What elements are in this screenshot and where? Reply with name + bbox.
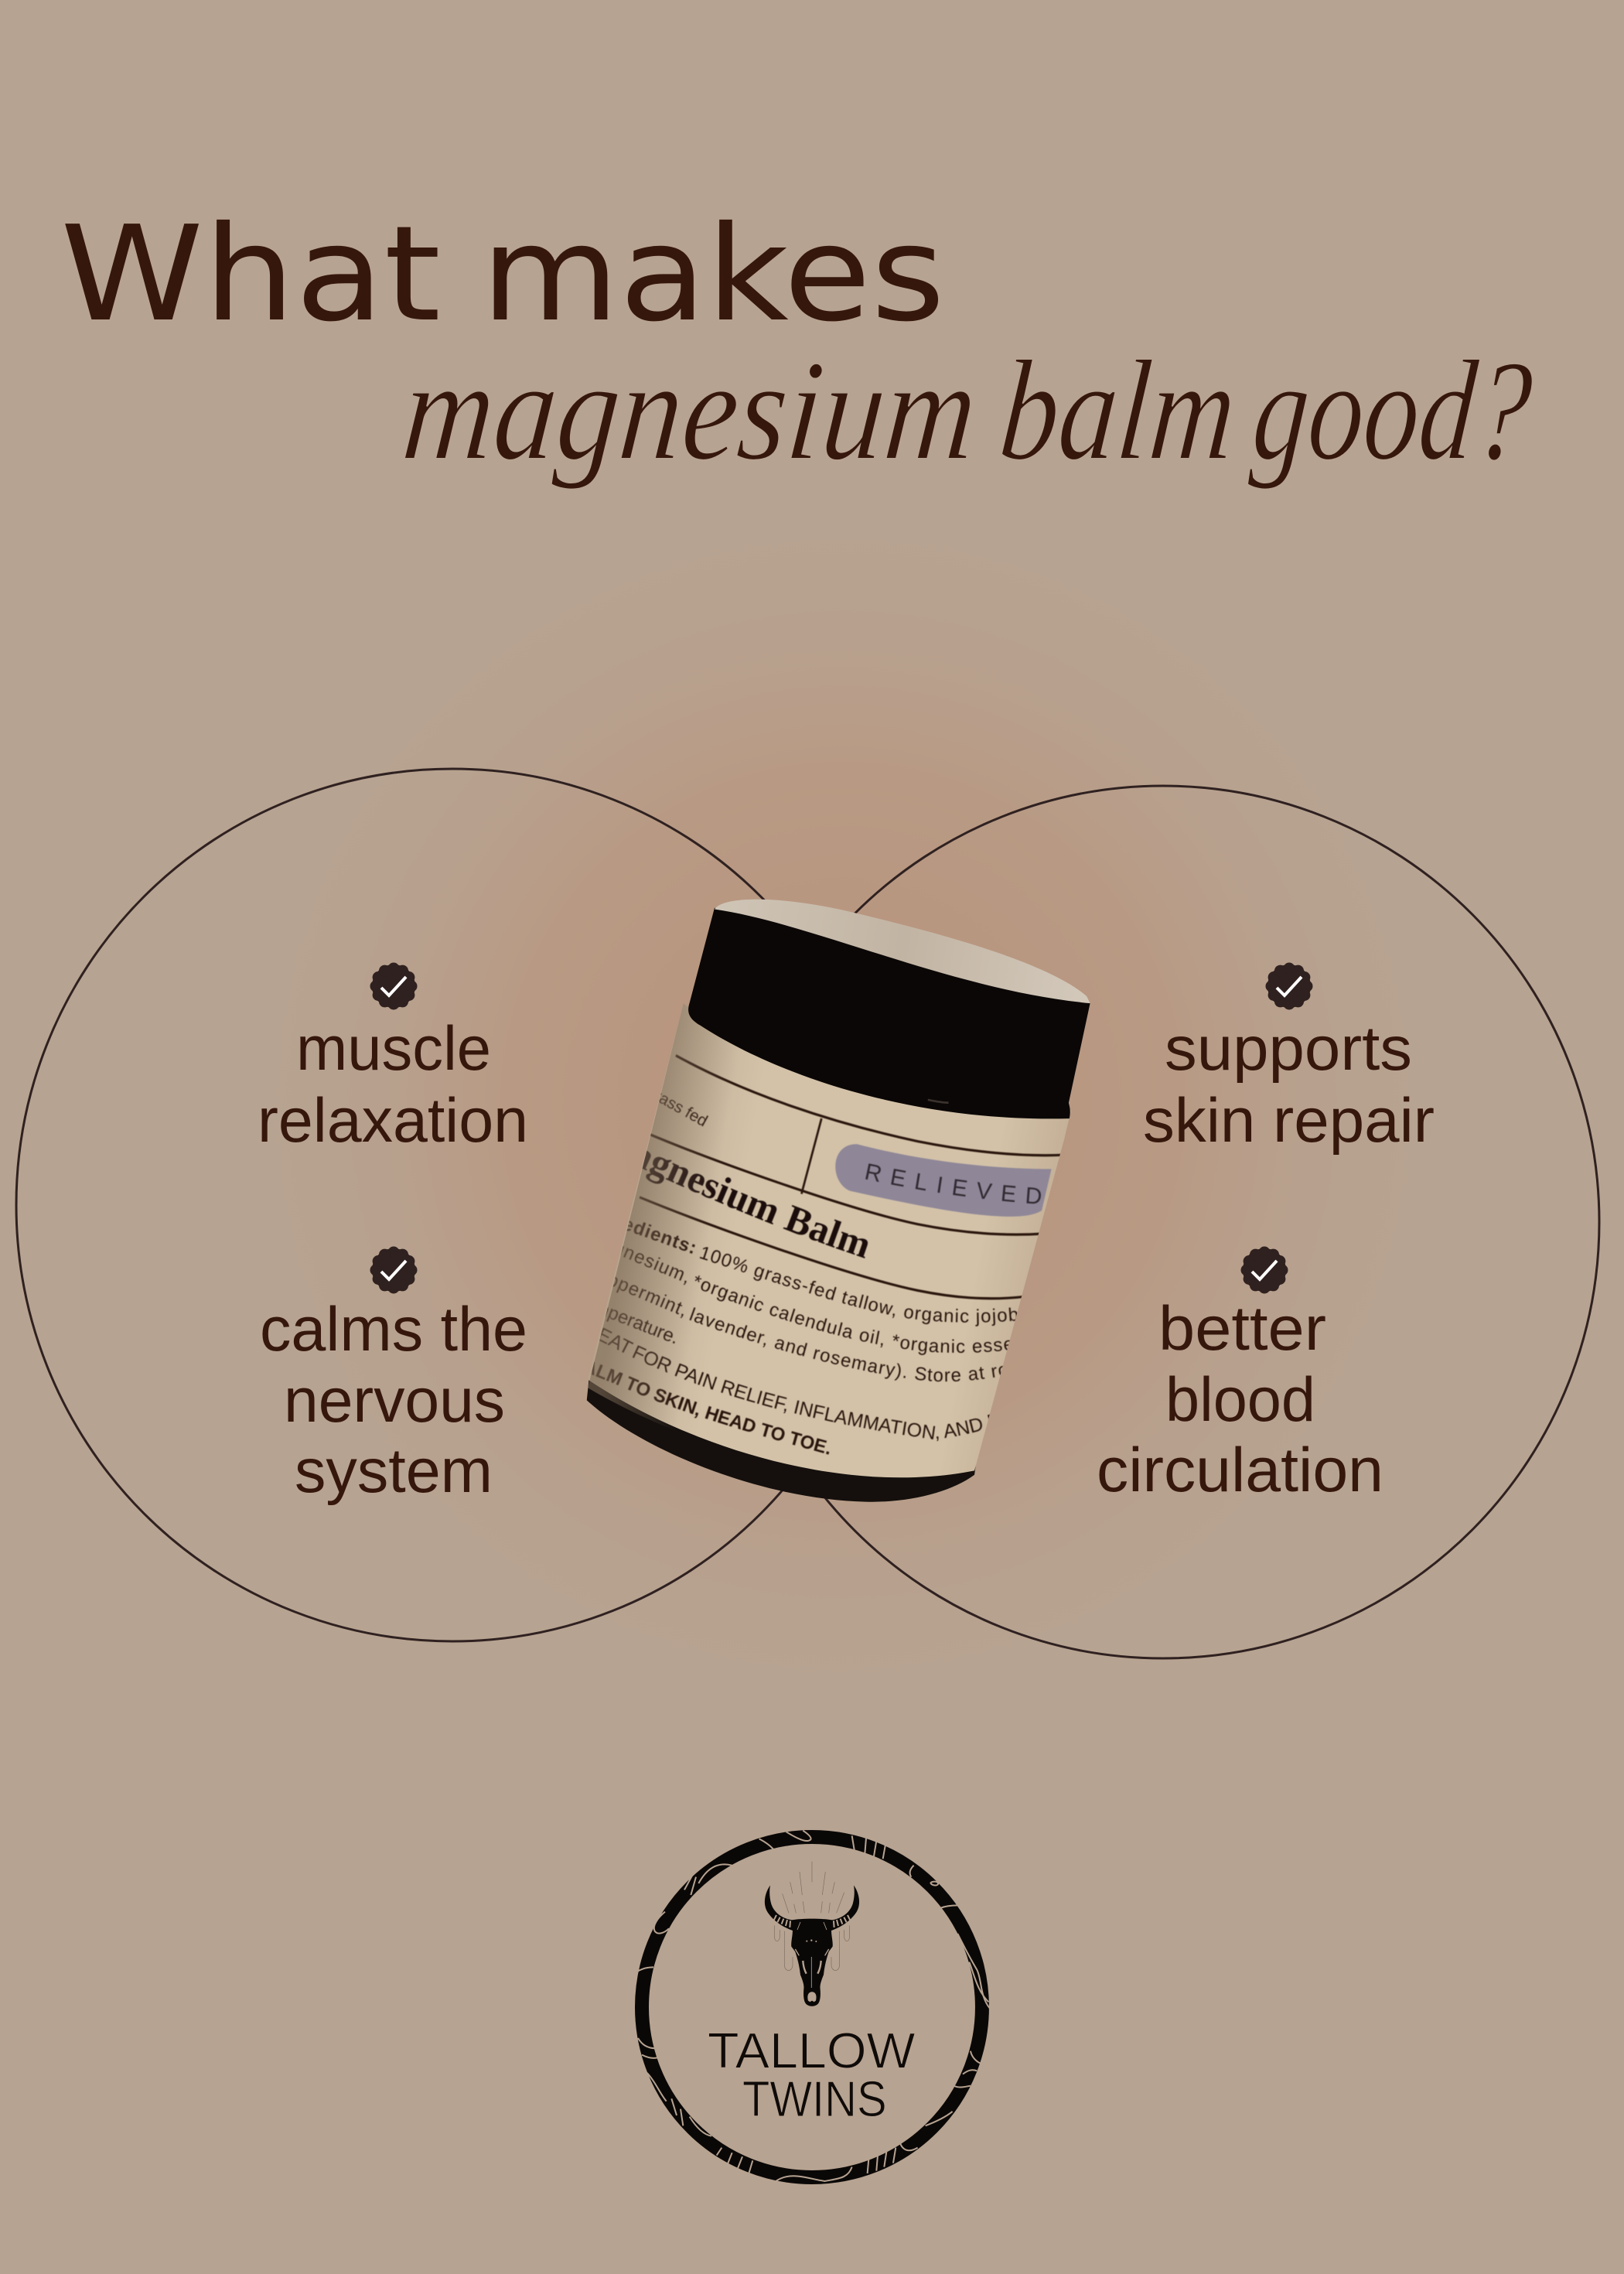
ingredients text: magnesium, <box>620 1245 687 1286</box>
skull <box>791 1919 833 2006</box>
lid top <box>715 900 1090 1003</box>
bull skull <box>765 1862 859 2006</box>
horns <box>765 1885 793 1931</box>
ingredients text: *organic calendula oil, *organic essential <box>694 1275 1010 1356</box>
relieved pill <box>835 1144 1052 1217</box>
snout opening and forehead dots <box>806 1939 817 2002</box>
ingredients text: temperature. <box>606 1307 676 1344</box>
title line two: balm <box>994 331 1242 490</box>
benefit text: relaxation <box>258 1086 528 1156</box>
crown rays <box>783 1862 844 1913</box>
ingredients text: 100% grass-fed tallow, organic jojoba oil, <box>699 1247 1018 1327</box>
right benefit: better blood circulation <box>1097 1247 1383 1505</box>
benefit text: circulation <box>1097 1436 1383 1505</box>
logo ring <box>642 1837 982 2177</box>
benefit text: skin repair <box>1143 1086 1435 1156</box>
benefit text: system <box>295 1436 493 1506</box>
jar lid <box>688 908 1090 1118</box>
ingredients text: BALM TO SKIN, HEAD TO TOE. <box>591 1361 830 1456</box>
title line one: makes <box>481 198 945 351</box>
benefit text: muscle <box>296 1014 491 1084</box>
logo: Tallow Twins <box>638 1831 990 2181</box>
left benefit: muscle relaxation <box>258 962 528 1156</box>
ingredients text: (peppermint, <box>612 1276 684 1319</box>
right circle outline <box>727 786 1599 1658</box>
benefit text: calms the <box>260 1295 527 1364</box>
ingredients text: lavender, and rosemary). Store at room <box>689 1307 1003 1382</box>
pill text: RELIEVED <box>865 1163 1042 1204</box>
label rules <box>640 1056 1064 1299</box>
icon: check badge <box>1265 962 1313 1010</box>
ingredients text: Ingredients: <box>626 1221 696 1255</box>
icon: check badge <box>370 962 418 1010</box>
right benefit: supports skin repair <box>1143 962 1435 1156</box>
logo wordmark: TWINS <box>742 2071 887 2127</box>
ingredients text <box>591 1221 1018 1456</box>
logo wordmark: TALLOW <box>708 2022 915 2078</box>
title line one: What <box>60 198 441 351</box>
hanging drips <box>774 1925 850 1970</box>
left benefit: calms the nervous system <box>260 1247 527 1506</box>
title line two: good? <box>1247 331 1537 490</box>
product jar <box>586 899 1090 1502</box>
jar label <box>588 1003 1071 1477</box>
benefit text: blood <box>1165 1365 1315 1435</box>
label printing <box>588 1004 1061 1456</box>
benefit text: better <box>1158 1294 1326 1364</box>
jar base <box>587 1374 976 1502</box>
left circle outline <box>16 769 889 1641</box>
lid glints <box>928 1100 949 1103</box>
ring wood-grain marks <box>638 1831 990 2181</box>
benefit text: supports <box>1165 1014 1412 1084</box>
left-edge shading <box>588 1004 725 1426</box>
skull details <box>774 1915 850 1988</box>
icon: check badge <box>370 1247 418 1293</box>
benefit text: nervous <box>284 1366 505 1436</box>
label text <box>591 1093 1042 1456</box>
ingredients text: FOR PAIN RELIEF, INFLAMMATION, AND RESTFUL <box>632 1344 990 1442</box>
ingredients text: GREAT <box>599 1327 634 1354</box>
size note: 2 oz grass fed <box>659 1093 708 1127</box>
logo wordmark <box>708 2022 915 2127</box>
icon: check badge <box>1240 1247 1288 1293</box>
title line two: magnesium <box>397 331 983 490</box>
background glow <box>232 493 1454 1716</box>
product name: Magnesium Balm <box>642 1150 868 1259</box>
